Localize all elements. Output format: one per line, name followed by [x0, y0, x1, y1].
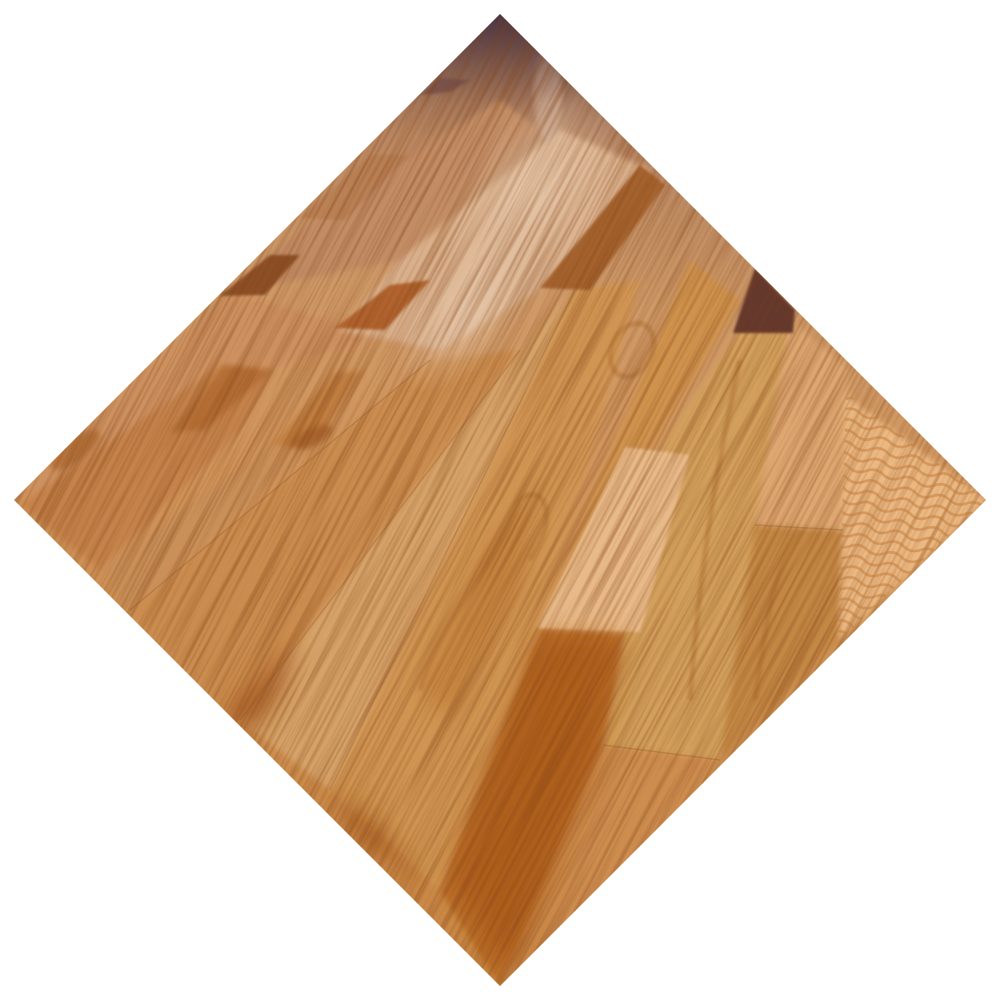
- lower darker streaks: [225, 480, 622, 975]
- highlight sheen: [464, 92, 616, 262]
- top shadow: [428, 14, 570, 94]
- left knots and darker streaks: [44, 365, 362, 477]
- wavy grain panel: [838, 396, 982, 642]
- dark boards: [220, 78, 795, 333]
- cathedral grain marks: [420, 316, 800, 700]
- board edges: [130, 290, 843, 790]
- light board: [537, 447, 690, 632]
